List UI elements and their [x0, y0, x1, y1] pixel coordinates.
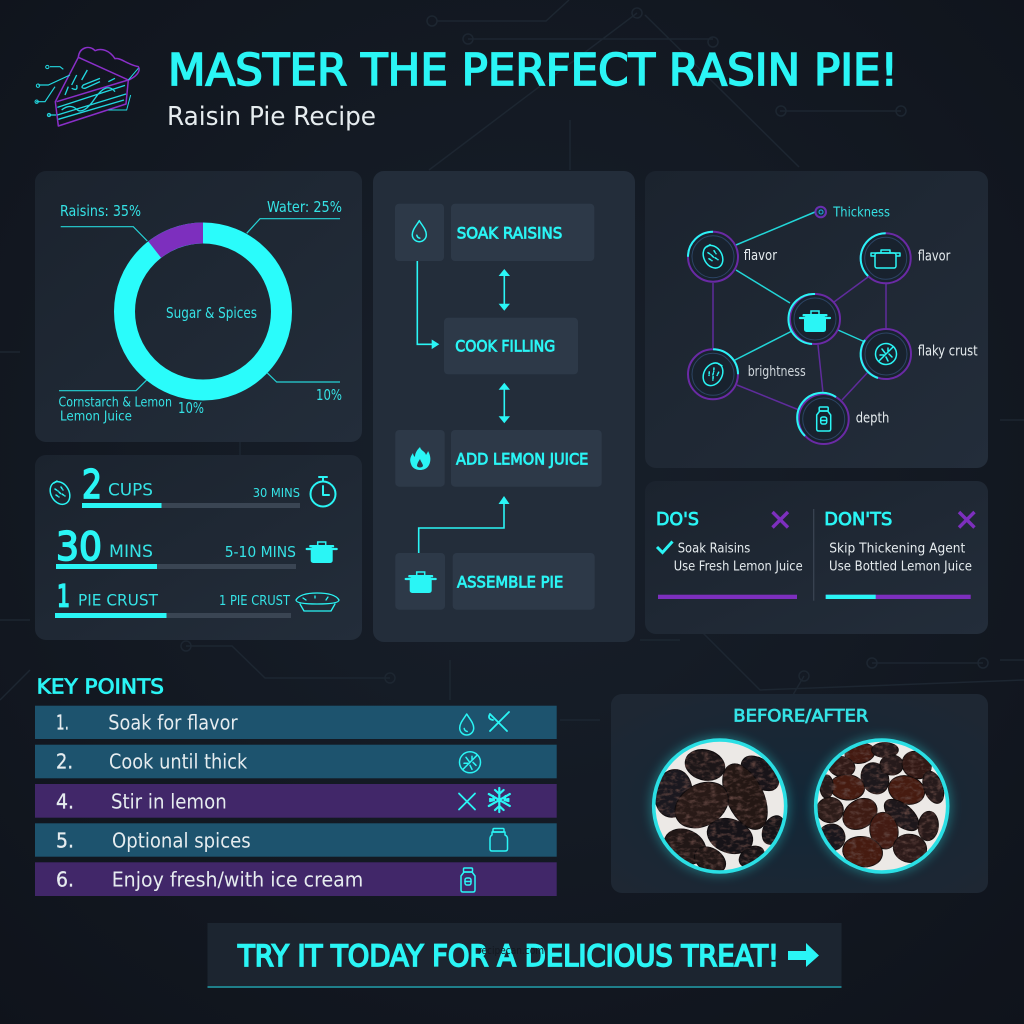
- arrow: soak elbow to cook: [417, 261, 439, 349]
- panel: flavor network: [645, 171, 988, 468]
- step: cook filling: [444, 318, 578, 374]
- watermark: recipecan.com: [478, 944, 544, 957]
- icon: right arrow: [788, 943, 819, 967]
- icon: neon pie slice: [35, 47, 139, 126]
- node: thickness: Thickness: [832, 206, 890, 221]
- panel: do's and don'ts: [645, 481, 988, 634]
- icon: raisin: [46, 478, 74, 508]
- node: depth: depth: [856, 411, 889, 427]
- node: flavor pot: [861, 233, 950, 283]
- panel: process flow: [373, 171, 635, 642]
- heading: before/after: BEFORE/AFTER: [733, 707, 868, 727]
- icon: don'ts cross: [959, 512, 974, 528]
- donut ring: [124, 233, 282, 390]
- title: MASTER THE PERFECT RASIN PIE!: [168, 45, 898, 96]
- step: soak raisins: [395, 204, 594, 261]
- do item one: Soak Raisins: [678, 541, 750, 557]
- step: cook filling: COOK FILLING: [455, 337, 555, 356]
- divider: [813, 509, 815, 601]
- step: assemble pie: ASSEMBLE PIE: [457, 572, 563, 591]
- row 1: 1.: [56, 710, 69, 734]
- arrow: soak to cook double: [499, 269, 510, 311]
- row 4: [35, 784, 557, 818]
- stat: 1 pie crust: [55, 580, 291, 618]
- label: cornstarch and lemon: Cornstarch & Lemon: [58, 395, 172, 411]
- stat: 30 mins: MINS: [109, 542, 153, 562]
- label: lemon juice: Lemon Juice: [60, 409, 132, 425]
- network links: [713, 212, 886, 410]
- don't item one: Skip Thickening Agent: [829, 541, 965, 557]
- do's bar: [658, 595, 797, 599]
- stat: 1 pie crust side: 1 PIE CRUST: [219, 594, 290, 609]
- row 2: Cook until thick: [109, 750, 248, 774]
- arrow: cook to lemon double: [499, 383, 510, 423]
- call to action banner: [208, 923, 842, 988]
- icon: stopwatch: [310, 477, 336, 506]
- subtitle: Raisin Pie Recipe: [167, 102, 376, 132]
- panel: quantities and times: [35, 455, 362, 640]
- icon: do's cross: [772, 512, 788, 528]
- node: thickness: [815, 206, 890, 221]
- row 2: 2.: [56, 750, 73, 774]
- step: soak raisins: SOAK RAISINS: [457, 223, 562, 242]
- stat: 30 mins time: 30 MINS: [253, 485, 300, 500]
- row 6: Enjoy fresh/with ice cream: [112, 868, 363, 892]
- label: sugar and spices: Sugar & Spices: [166, 304, 257, 322]
- row 1: [35, 706, 557, 739]
- row 4: 4.: [56, 789, 74, 813]
- stat: 5-10 mins time: 5-10 MINS: [225, 543, 296, 561]
- row 2: [35, 745, 557, 778]
- node: brightness: brightness: [748, 364, 806, 380]
- heading: do's: DO'S: [656, 509, 699, 530]
- row 4: Stir in lemon: [111, 789, 227, 813]
- node: flavor raisin: flavor: [744, 248, 777, 264]
- icon: flame: [410, 447, 430, 470]
- row 5: [35, 823, 557, 857]
- row 5: 5.: [56, 828, 74, 852]
- label: right 10 percent: 10%: [316, 386, 342, 404]
- panel: before and after: [611, 694, 988, 893]
- arrow: assemble elbow to lemon: [419, 496, 510, 553]
- heading: key points: KEY POINTS: [37, 674, 164, 698]
- donut leader lines: [59, 219, 340, 391]
- label: water: Water: 25%: [267, 198, 342, 216]
- node: flaky crust: flaky crust: [918, 344, 978, 360]
- icon: pot: [307, 542, 337, 563]
- stat: 2 cups: [82, 463, 300, 508]
- row 1: Soak for flavor: [108, 710, 238, 734]
- stat: 2 cups: CUPS: [108, 481, 153, 501]
- row 6: [35, 862, 557, 896]
- stat: 1 pie crust: PIE CRUST: [78, 590, 158, 609]
- row 6: 6.: [56, 868, 74, 892]
- node: center pot: [788, 294, 840, 344]
- photo: raisins before: [650, 736, 790, 878]
- icon: check: [657, 542, 672, 552]
- list: key points: [35, 706, 557, 896]
- step: add lemon juice: [395, 430, 602, 487]
- node: depth: [797, 393, 889, 444]
- stat: 2 cups: 2: [82, 463, 102, 508]
- panel: ingredient donut chart: [35, 171, 362, 442]
- label: bottom 10 percent: 10%: [178, 399, 204, 417]
- step: add lemon juice: ADD LEMON JUICE: [456, 449, 588, 468]
- stat: 30 mins: 30: [56, 525, 102, 570]
- do item two: Use Fresh Lemon Juice: [674, 558, 803, 574]
- heading: don'ts: DON'TS: [824, 509, 892, 530]
- icon: pie dish: [296, 593, 339, 611]
- label: raisins: Raisins: 35%: [60, 202, 141, 220]
- step: assemble pie: [395, 553, 595, 610]
- stat: 1 pie crust: 1: [57, 580, 70, 615]
- don'ts bar: [826, 595, 971, 599]
- node: flavor raisin: [688, 232, 777, 282]
- node: flavor pot: flavor: [918, 249, 950, 265]
- photo: raisins after: [812, 736, 952, 876]
- node: brightness: [688, 349, 806, 399]
- call to action text: TRY IT TODAY FOR A DELICIOUS TREAT!: [237, 939, 779, 973]
- node: flaky crust: [861, 329, 978, 379]
- row 5: Optional spices: [112, 828, 251, 852]
- don't item two: Use Bottled Lemon Juice: [829, 558, 972, 574]
- stat: 30 mins: [56, 525, 296, 570]
